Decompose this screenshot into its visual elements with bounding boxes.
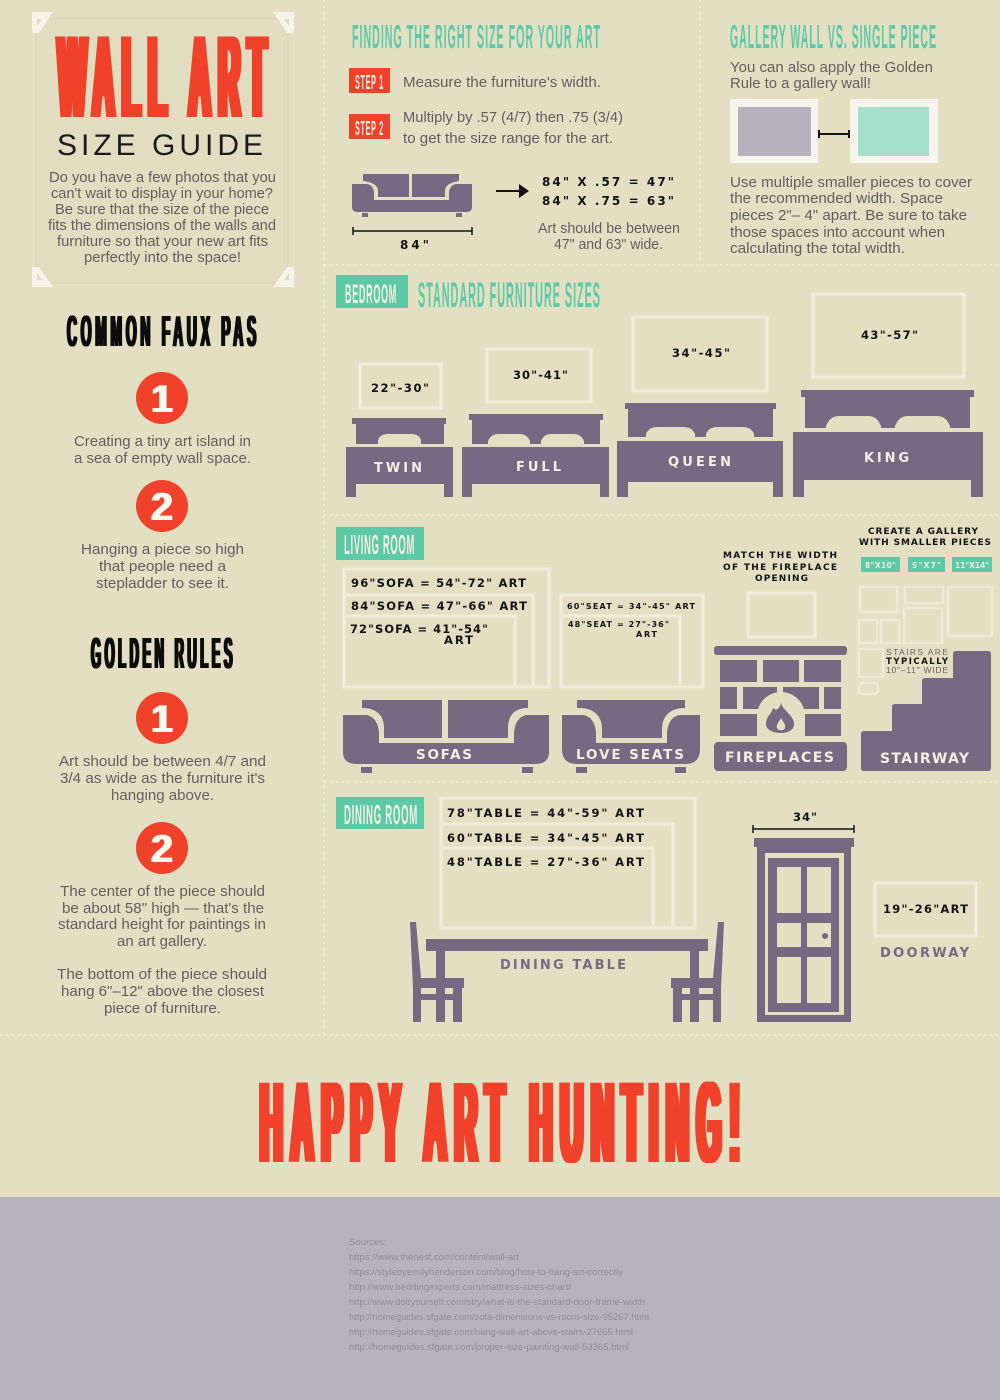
panel: bedroom: BEDROOM: [345, 279, 397, 309]
doorway art frame: 19"-26"ART: [883, 902, 968, 916]
footer: sources: Sources:: [349, 1237, 386, 1248]
faux pas 2 text: that people need a: [99, 559, 227, 575]
rule 1 text: Art should be between 4/7 and: [59, 754, 266, 770]
text: COMMON FAUX PAS: [67, 307, 260, 356]
love seat art frames: ART: [636, 630, 658, 639]
text: WALL ART: [58, 11, 274, 142]
art frame king: [813, 294, 964, 377]
text: GOLDEN RULES: [91, 629, 236, 678]
stairs note: [886, 647, 949, 675]
stairs note: STAIRS ARE: [886, 647, 948, 657]
subtitle: size guide: SIZE GUIDE: [57, 129, 263, 162]
gallery size tags: 5"X7": [912, 561, 941, 570]
gallery size tags: 11"X14": [955, 561, 989, 570]
tag: bedroom: [336, 275, 408, 309]
gallery body text: [730, 175, 972, 257]
icon: twin bed: TWIN: [374, 461, 422, 476]
rule 2 text: The bottom of the piece should: [57, 967, 267, 983]
art frame twin: 22"-30": [371, 381, 429, 395]
intro text: Be sure that the size of the piece: [55, 202, 269, 218]
icon: flame: [766, 703, 794, 733]
sofa art frames: 96"SOFA = 54"-72" ART: [351, 576, 526, 590]
icon: fireplace: [714, 646, 847, 771]
arrow: [496, 184, 529, 198]
icon: love seat: [562, 700, 700, 773]
icon: left chair: [410, 922, 464, 1022]
stairs note: TYPICALLY: [886, 657, 949, 667]
panel: dining room: [336, 797, 976, 1022]
footer: sources: https://stylebyemilyhenderson.com/blog/how-to-hang-art-correctly: [349, 1267, 623, 1278]
panel: golden rules: [57, 629, 267, 1017]
faux pas 1 text: [74, 434, 251, 467]
fireplace caption: OPENING: [755, 574, 808, 584]
icon: door: [754, 838, 854, 1022]
icon: full bed: [462, 414, 609, 497]
step 1 badge: [349, 68, 390, 94]
icon: right chair: [671, 922, 724, 1022]
rule 2 text: [57, 884, 267, 1017]
fireplace art frame: [748, 593, 815, 637]
icon: queen bed: [617, 403, 783, 497]
panel: finding the right size: [349, 18, 680, 253]
fireplace caption: MATCH THE WIDTH: [723, 551, 837, 561]
rule 1 text: [59, 754, 266, 804]
step 1 text: Measure the furniture's width.: [403, 75, 601, 91]
footer: sources: http://www.doityourself.com/stry/what-is-the-standard-door-frame-width: [349, 1297, 645, 1308]
gallery intro text: You can also apply the Golden: [730, 60, 933, 76]
number badge 2: 2: [151, 486, 173, 529]
rule 1 text: 3/4 as wide as the furniture it's: [60, 771, 265, 787]
icon: small sofa: [352, 174, 472, 217]
intro text: perfectly into the space!: [84, 250, 241, 266]
sofa art frames: 84"SOFA = 47"-66" ART: [351, 599, 527, 613]
rule 2 text: an art gallery.: [117, 934, 207, 950]
step 2 text: Multiply by .57 (4/7) then .75 (3/4): [403, 110, 623, 126]
panel: finding the right size: STEP 2: [355, 118, 384, 140]
icon: sofa: [343, 700, 549, 773]
table art frames: 48"TABLE = 27"-36" ART: [447, 855, 644, 869]
footer: sources: https://www.thenest.com/content/wall-art: [349, 1252, 519, 1263]
intro text: [48, 170, 276, 266]
gallery body text: those spaces into account when: [730, 225, 945, 241]
calculation result text: 47" and 63" wide.: [554, 237, 663, 253]
gallery frames: [859, 587, 992, 694]
number badge 2: [136, 480, 188, 532]
panel: gallery wall vs single piece: [730, 18, 972, 257]
art frame full: [487, 349, 591, 402]
dimension line: 34 inches: 34": [793, 810, 817, 824]
sofa art frames: 72"SOFA = 41"-54": [350, 622, 488, 636]
icon: stairway: [861, 651, 991, 771]
art frame queen: 34"-45": [672, 346, 730, 360]
rule 1 text: hanging above.: [111, 788, 214, 804]
rule badge 2: [136, 822, 188, 874]
icon: fireplace: FIREPLACES: [725, 750, 834, 766]
gallery caption: WITH SMALLER PIECES: [859, 538, 991, 548]
gallery body text: pieces 2"– 4" apart. Be sure to take: [730, 208, 967, 224]
icon: king bed: [793, 390, 983, 497]
step 2 text: to get the size range for the art.: [403, 131, 613, 147]
panel: common faux pas: [67, 307, 260, 592]
gallery caption: CREATE A GALLERY: [868, 527, 978, 537]
rule 2 text: hang 6"–12" above the closest: [61, 984, 264, 1000]
footer: sources: http://homeguides.sfgate.com/hang-wall-art-above-stairs-27655.html: [349, 1327, 633, 1338]
calculation result text: Art should be between: [538, 221, 680, 237]
table art frames: [441, 798, 695, 928]
number badge 1: [136, 372, 188, 424]
gallery size tags: [861, 557, 992, 572]
spacing connector: [819, 130, 849, 138]
icon: stairway: STAIRWAY: [880, 751, 970, 767]
title panel: [32, 11, 294, 287]
framed piece grey: [730, 99, 818, 163]
panel: living room: LIVING ROOM: [344, 529, 415, 560]
gallery body text: Use multiple smaller pieces to cover: [730, 175, 972, 191]
icon: full bed: FULL: [516, 460, 561, 475]
calculation result text: [538, 221, 680, 253]
rule 2 text: piece of furniture.: [104, 1001, 221, 1017]
faux pas 2 text: stepladder to see it.: [96, 576, 229, 592]
footer: sources: http://homeguides.sfgate.com/proper-size-painting-wall-53365.html: [349, 1342, 629, 1353]
gallery intro text: [730, 60, 933, 92]
panel: bedroom: STANDARD FURNITURE SIZES: [418, 276, 601, 315]
rule 2 text: be about 58" high — that's the: [62, 901, 264, 917]
icon: queen bed: QUEEN: [668, 455, 731, 470]
doorway art frame: [875, 883, 976, 936]
label: doorway: DOORWAY: [880, 946, 970, 961]
framed piece teal: [850, 99, 938, 163]
panel: bedroom: [336, 275, 983, 497]
gallery caption: [859, 527, 991, 548]
fireplace caption: [723, 551, 837, 584]
gallery size tags: 8"X10": [865, 561, 896, 570]
footer: sources: http://homeguides.sfgate.com/sofa-dimensions-vs-room-size-95267.html: [349, 1312, 649, 1323]
rule badge 1: 1: [151, 698, 173, 741]
gallery body text: the recommended width. Space: [730, 191, 943, 207]
rule 2 text: The center of the piece should: [60, 884, 265, 900]
panel: finding the right size: STEP 1: [355, 72, 384, 94]
art frame king: 43"-57": [861, 328, 918, 342]
icon: twin bed: [346, 418, 453, 497]
faux pas 1 text: a sea of empty wall space.: [74, 451, 251, 467]
love seat art frames: [561, 595, 703, 687]
gallery intro text: Rule to a gallery wall!: [730, 76, 871, 92]
art frame queen: [633, 317, 767, 391]
icon: love seat: LOVE SEATS: [576, 747, 684, 763]
panel: living room: [336, 527, 992, 773]
photo corners: [32, 12, 294, 287]
footer: sources: [0, 1197, 1000, 1400]
step 2 badge: [349, 114, 390, 140]
footer: sources: http://www.beddingexperts.com/mattress-sizes-chart/: [349, 1282, 571, 1293]
number badge 1: 1: [151, 378, 173, 421]
rule 2 text: standard height for paintings in: [58, 917, 266, 933]
art frame full: 30"-41": [513, 368, 568, 382]
calculation: 84" X .57 = 47": [542, 175, 674, 189]
fireplace caption: OF THE FIREPLACE: [723, 563, 837, 573]
icon: king bed: KING: [864, 451, 909, 466]
calculation: [542, 175, 674, 208]
icon: sofa: SOFAS: [416, 747, 472, 763]
panel: dining room: DINING ROOM: [344, 799, 418, 830]
rule badge 1: [136, 692, 188, 744]
table art frames: 60"TABLE = 34"-45" ART: [447, 831, 644, 845]
intro text: Do you have a few photos that you: [49, 170, 276, 186]
tag: dining room: [336, 797, 424, 830]
calculation: 84" X .75 = 63": [542, 194, 674, 208]
love seat art frames: 48"SEAT = 27"-36": [568, 620, 669, 629]
art frame twin: [360, 364, 441, 408]
sofa art frames: [344, 569, 549, 687]
intro text: furniture so that your new art fits: [57, 234, 268, 250]
love seat art frames: 60"SEAT = 34"-45" ART: [567, 602, 696, 611]
faux pas 1 text: Creating a tiny art island in: [74, 434, 251, 450]
faux pas 2 text: [81, 542, 244, 592]
table art frames: 78"TABLE = 44"-59" ART: [447, 806, 644, 820]
intro text: fits the dimensions of the walls and: [48, 218, 276, 234]
icon: dining table: [426, 939, 708, 1022]
tag: living room: [336, 527, 424, 560]
dimension line: 84 inches: 84": [400, 238, 429, 252]
dimension line: 34 inches: [753, 810, 854, 833]
faux pas 2 text: Hanging a piece so high: [81, 542, 244, 558]
step 2 text: [403, 110, 623, 147]
sofa art frames: ART: [444, 633, 473, 647]
icon: dining table: DINING TABLE: [500, 958, 626, 973]
gallery body text: calculating the total width.: [730, 241, 905, 257]
dimension line: 84 inches: [353, 227, 472, 252]
stairs note: 10"–11" WIDE: [886, 665, 948, 675]
intro text: can't wait to display in your home?: [51, 186, 273, 202]
rule badge 2: 2: [151, 828, 173, 871]
